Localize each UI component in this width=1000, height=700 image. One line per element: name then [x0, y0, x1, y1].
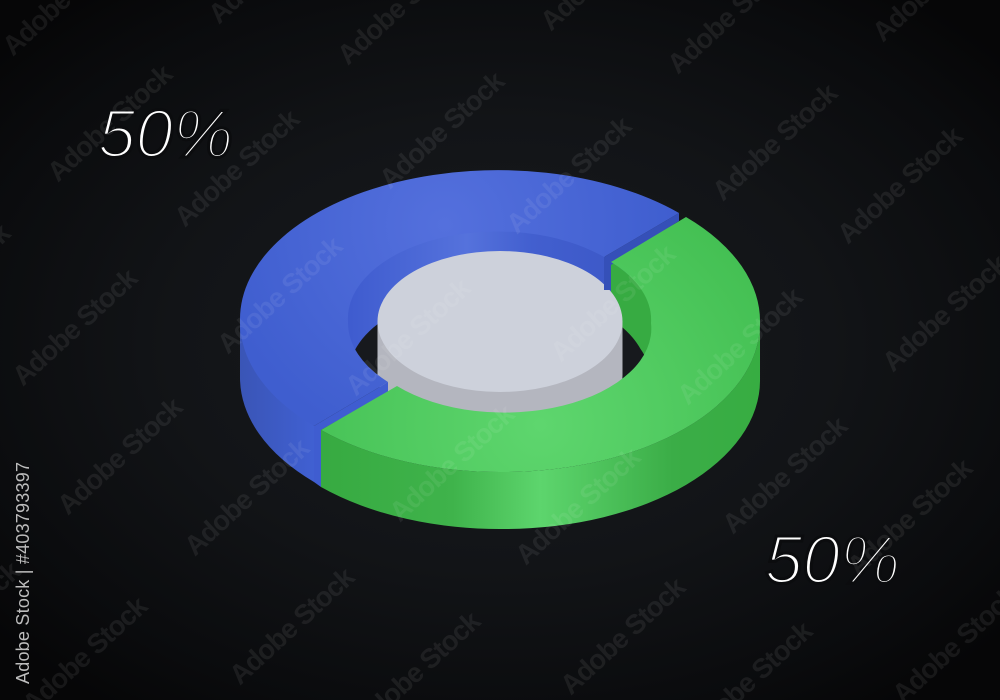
outer side: blue segment	[240, 321, 314, 482]
watermark pattern: Adobe Stock	[383, 397, 521, 527]
cut face: blue segment, upper	[604, 213, 679, 290]
hole floor	[348, 289, 651, 464]
watermark pattern: Adobe Stock	[339, 271, 477, 401]
watermark pattern: Adobe Stock	[41, 57, 179, 187]
top face: green segment	[321, 217, 760, 472]
centre disc	[378, 251, 622, 445]
watermark pattern: Adobe Stock	[671, 280, 809, 410]
outer side: green segment	[321, 324, 760, 529]
watermark pattern: Adobe Stock	[831, 119, 969, 249]
watermark pattern: Adobe Stock	[706, 76, 844, 206]
watermark pattern: Adobe Stock	[716, 409, 854, 539]
watermark pattern: Adobe Stock	[168, 102, 306, 232]
watermark pattern: Adobe Stock	[544, 237, 682, 367]
watermark pattern: Adobe Stock	[509, 440, 647, 570]
watermark pattern: Adobe Stock	[211, 229, 349, 359]
watermark pattern: Adobe Stock	[554, 570, 692, 700]
watermark pattern: Adobe Stock	[373, 64, 511, 194]
cut face: blue segment, lower	[314, 382, 388, 487]
donut chart	[240, 170, 760, 529]
stock id side text: Adobe Stock | #403793397	[13, 462, 33, 684]
watermark pattern: Adobe Stock	[841, 451, 979, 581]
inner wall: green segment	[611, 262, 653, 382]
percentage label: blue segment: 50%	[98, 97, 233, 172]
watermark pattern: Adobe Stock	[51, 390, 189, 520]
watermark pattern: Adobe Stock	[6, 261, 144, 391]
top face: blue segment	[240, 170, 679, 426]
watermark pattern: Adobe Stock	[223, 560, 361, 690]
inner wall: blue segment	[346, 231, 650, 409]
percentage label: green segment: 50%	[765, 523, 900, 598]
watermark pattern: Adobe Stock	[178, 431, 316, 561]
watermark pattern: Adobe Stock	[500, 109, 638, 239]
